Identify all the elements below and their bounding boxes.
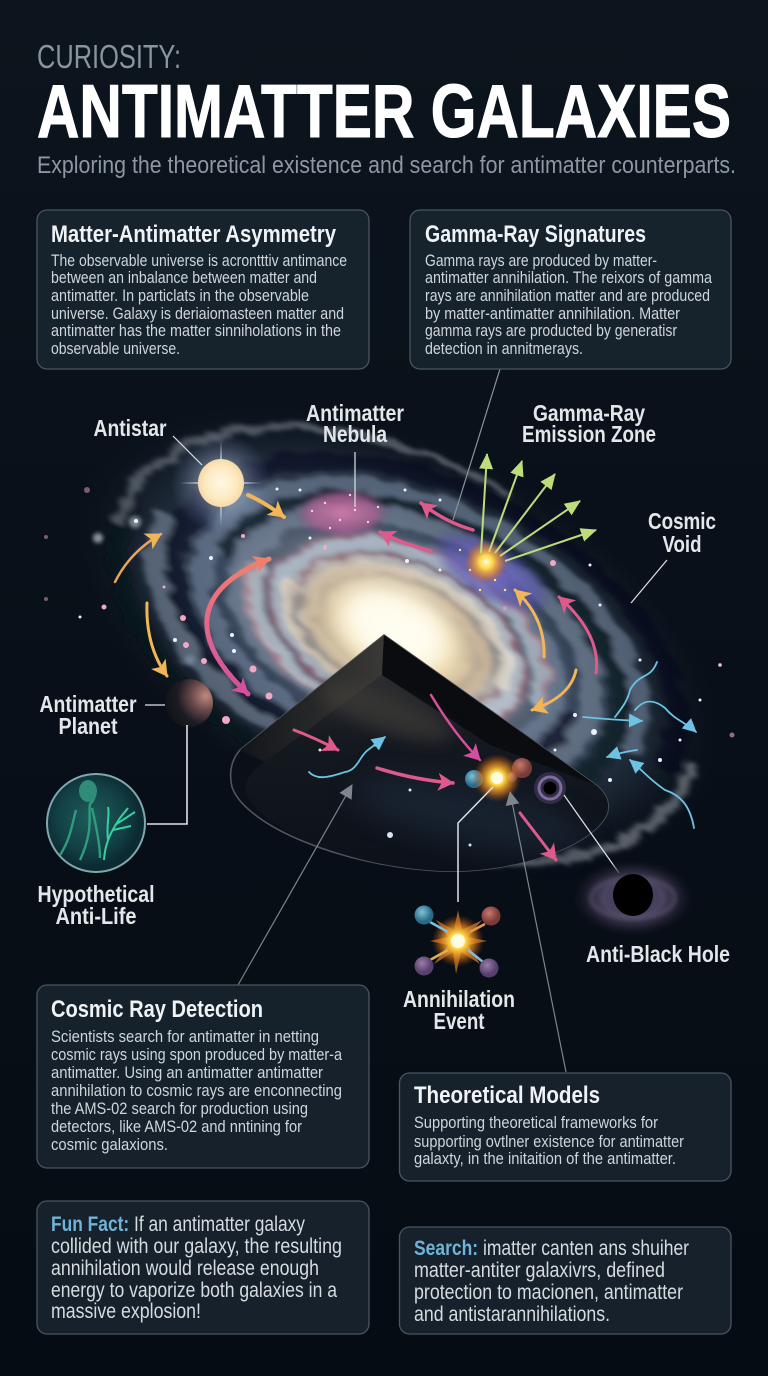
search text: and antistarannihilations. (414, 1303, 610, 1326)
anti-black hole in wedge (534, 772, 566, 804)
body: by matter-antimatter annihilation. Matter (425, 305, 680, 323)
body: galaxty, in the initaition of the antimatter. (414, 1150, 676, 1168)
label: hypothetical anti-life: Anti-Life (56, 903, 136, 929)
label: annihilation event (403, 986, 515, 1034)
label: annihilation event: Event (434, 1008, 485, 1034)
fun fact text (51, 1213, 342, 1323)
body: rays are annihilation matter and are produced (425, 287, 710, 305)
title (37, 38, 736, 179)
panel: fun fact (37, 1201, 369, 1334)
body: annihilation to cosmic rays are enconnecting (51, 1082, 342, 1100)
panel: search (400, 1227, 731, 1334)
panel: matter-antimatter asymmetry (37, 210, 369, 369)
heading: Matter-Antimatter Asymmetry (51, 221, 337, 248)
panel: theoretical models (400, 1073, 731, 1181)
wedge interior (245, 671, 608, 871)
annihilation cluster in wedge (465, 754, 566, 804)
label: antimatter planet: Planet (58, 713, 118, 739)
search text (414, 1237, 689, 1326)
wedge left wall (240, 635, 384, 762)
body: The observable universe is acrontttiv antimance (51, 252, 347, 270)
body: antimatter. Using an antimatter antimatter (51, 1064, 323, 1082)
label: antimatter planet: Antimatter (40, 691, 137, 717)
antimatter nebula cloud (294, 488, 390, 538)
panel: gamma-ray signatures (410, 210, 731, 369)
search text: protection to macionen, antimatter (414, 1281, 683, 1304)
annihilation event icon (414, 906, 500, 978)
gamma-ray burst (459, 540, 508, 591)
label: cosmic void: Cosmic (648, 508, 716, 534)
body: cosmic rays using spon produced by matter-a (51, 1046, 343, 1064)
panel: cosmic ray detection (37, 985, 369, 1168)
body: supporting ovtlner existence for antimatter (414, 1133, 684, 1151)
label: antistar: Antistar (94, 415, 167, 441)
wedge right wall (382, 635, 596, 785)
pink stars (44, 487, 734, 788)
body: between an inbalance between matter and (51, 269, 317, 287)
fun fact text: massive explosion! (51, 1300, 201, 1323)
label: anti-black hole: Anti-Black Hole (586, 941, 730, 967)
body (51, 1028, 343, 1154)
label: antimatter planet (40, 691, 137, 739)
body: Scientists search for antimatter in netting (51, 1028, 319, 1046)
search text: matter-antiter galaxivrs, defined (414, 1259, 665, 1282)
body: the AMS-02 search for production using (51, 1100, 308, 1118)
fun fact text: collided with our galaxy, the resulting (51, 1235, 342, 1258)
leader: gamma-ray signatures (453, 369, 500, 520)
anti-black hole (573, 860, 693, 936)
body: gamma rays are producted by generatisr (425, 322, 677, 340)
label: cosmic void: Void (662, 531, 702, 557)
gamma-ray emission zone cloud (416, 511, 568, 633)
label: antimatter nebula: Nebula (323, 421, 387, 447)
stars (78, 488, 722, 831)
cosmic ray squiggles (309, 662, 696, 828)
body: antimatter has the matter sinniholations in the (51, 322, 341, 340)
label: hypothetical anti-life (38, 881, 154, 929)
body: Gamma rays are produced by matter- (425, 252, 657, 270)
body: universe. Galaxy is deriaiomasteen matter and (51, 305, 344, 323)
kicker: CURIOSITY: (37, 38, 181, 75)
fun fact text: Fun Fact: If an antimatter galaxy (51, 1213, 305, 1236)
heading: Gamma-Ray Signatures (425, 221, 646, 248)
search text: Search: imatter canten ans shuiher (414, 1237, 689, 1260)
body: observable universe. (51, 340, 180, 358)
heading: Cosmic Ray Detection (51, 996, 263, 1023)
label: hypothetical anti-life: Hypothetical (38, 881, 154, 907)
label: gamma-ray emission zone: Gamma-Ray (533, 400, 645, 426)
heading: Theoretical Models (414, 1082, 600, 1109)
cutaway wedge (231, 635, 608, 871)
body: cosmic galaxions. (51, 1136, 168, 1154)
antistar (171, 433, 271, 533)
flow arrows (115, 495, 597, 860)
label: cosmic void (648, 508, 716, 557)
label: antimatter nebula (306, 400, 404, 447)
label: gamma-ray emission zone (522, 400, 656, 447)
gamma-ray arrows (481, 454, 596, 561)
body: detection in annitmerays. (425, 340, 583, 358)
label: gamma-ray emission zone: Emission Zone (522, 421, 656, 447)
body (414, 1114, 684, 1168)
fun fact text: energy to vaporize both galaxies in a (51, 1279, 337, 1302)
body (51, 252, 347, 358)
leaders (145, 436, 667, 1072)
galaxy (0, 306, 768, 964)
body (425, 252, 713, 358)
fun fact text: annihilation would release enough (51, 1257, 319, 1280)
body: antimatter. In particlats in the observable (51, 287, 309, 305)
label: annihilation event: Annihilation (403, 986, 515, 1012)
body: Supporting theoretical frameworks for (414, 1114, 658, 1132)
hypothetical anti-life icon (47, 774, 145, 872)
antimatter planet (165, 679, 213, 727)
body: detectors, like AMS-02 and nntining for (51, 1118, 302, 1136)
label: antimatter nebula: Antimatter (306, 400, 404, 426)
body: antimatter annihilation. The reixors of gamma (425, 269, 713, 287)
